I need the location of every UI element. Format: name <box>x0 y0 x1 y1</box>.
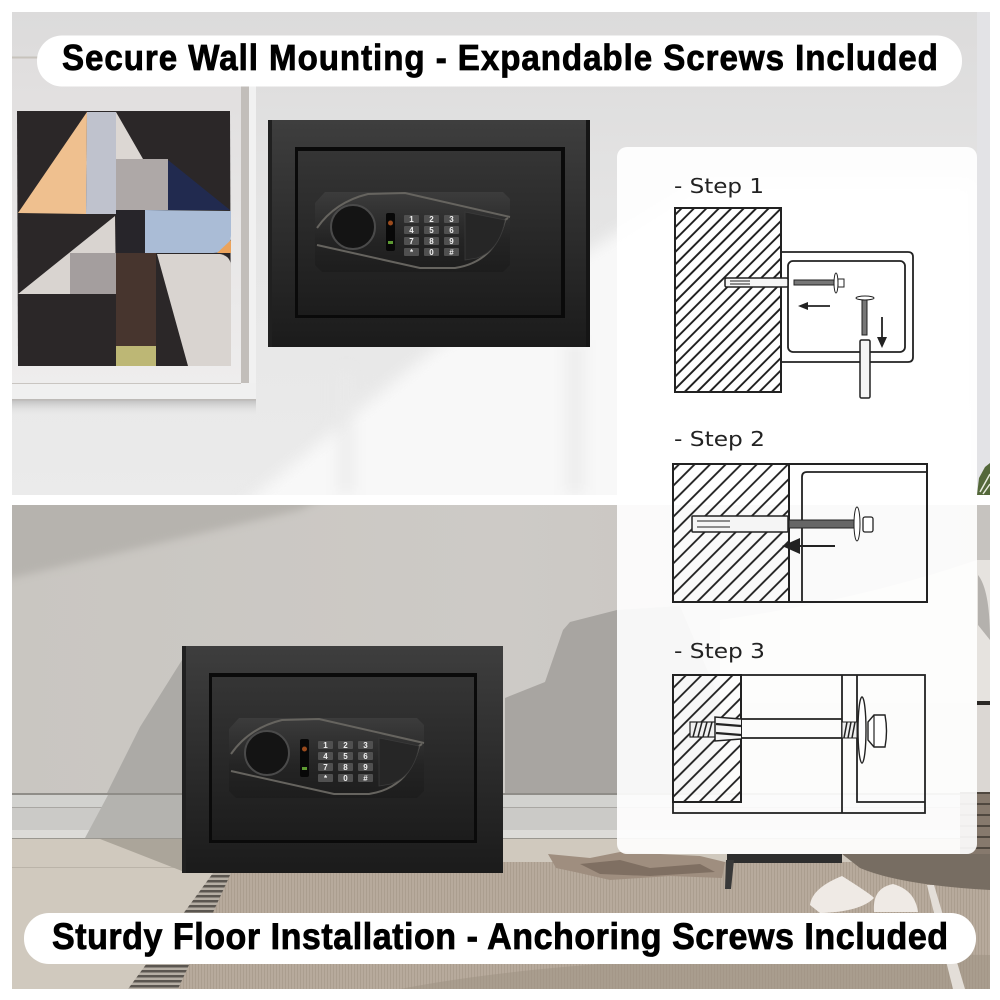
step 2 heading: - Step 2 <box>674 427 765 451</box>
keypad: 1 <box>409 215 414 224</box>
keypad: 8 <box>343 763 348 772</box>
safe door <box>295 147 565 318</box>
step 1 heading: - Step 1 <box>674 174 764 198</box>
keypad: 3 <box>363 741 368 750</box>
keypad: 6 <box>363 752 368 761</box>
title pill: floor installation: Sturdy Floor Installation - Anchoring Screws Included <box>52 916 948 957</box>
baseboard <box>89 808 101 830</box>
keypad: 5 <box>429 226 434 235</box>
keypad <box>318 741 373 783</box>
sofa <box>977 560 990 701</box>
keypad: 0 <box>343 774 348 783</box>
electronic lock panel <box>315 192 510 272</box>
step 2 diagram <box>673 464 927 602</box>
top photo: wall scene <box>12 12 990 520</box>
sofa legs <box>727 854 842 863</box>
keypad: 8 <box>429 237 434 246</box>
keypad <box>404 215 459 257</box>
step 3 diagram <box>673 675 925 813</box>
keypad: * <box>410 248 414 257</box>
keypad: 6 <box>449 226 454 235</box>
arrow: left <box>782 538 835 554</box>
keypad: * <box>324 774 328 783</box>
status display <box>300 739 309 777</box>
bottom photo: floor scene <box>0 490 990 989</box>
rug <box>178 862 990 989</box>
step 3 heading: - Step 3 <box>674 639 765 663</box>
keypad: 2 <box>343 741 348 750</box>
status display <box>386 213 395 251</box>
arrow: left <box>798 302 830 310</box>
keypad: 9 <box>363 763 368 772</box>
keypad: # <box>363 774 368 783</box>
electronic lock panel <box>229 718 424 798</box>
keypad: 0 <box>429 248 434 257</box>
safe shadow on wall <box>107 660 182 793</box>
keypad: 9 <box>449 237 454 246</box>
keypad: 3 <box>449 215 454 224</box>
floor-standing safe <box>182 646 503 873</box>
title pill: wall mounting: Secure Wall Mounting - Expandable Screws Included <box>62 39 938 78</box>
keypad: # <box>449 248 454 257</box>
arrow: down <box>877 317 887 348</box>
floor <box>12 839 990 989</box>
dial knob <box>331 205 375 249</box>
crumpled cloth <box>548 852 725 880</box>
keypad: 4 <box>323 752 328 761</box>
keypad: 2 <box>429 215 434 224</box>
keypad: 1 <box>323 741 328 750</box>
framed abstract artwork <box>12 56 256 416</box>
step 1 diagram <box>675 208 913 398</box>
wall-mounted safe <box>268 120 590 347</box>
sofa shadow on wall <box>505 610 617 793</box>
keypad: 5 <box>343 752 348 761</box>
keypad: 4 <box>409 226 414 235</box>
safe door <box>209 673 477 843</box>
icon: plant sprig <box>977 463 990 495</box>
slippers <box>810 876 874 913</box>
side table <box>842 854 990 890</box>
keypad: 7 <box>323 763 328 772</box>
dial knob <box>245 731 289 775</box>
keypad: 7 <box>409 237 414 246</box>
panel: installation steps <box>617 147 977 854</box>
dark wood stripes at right edge <box>960 792 990 854</box>
